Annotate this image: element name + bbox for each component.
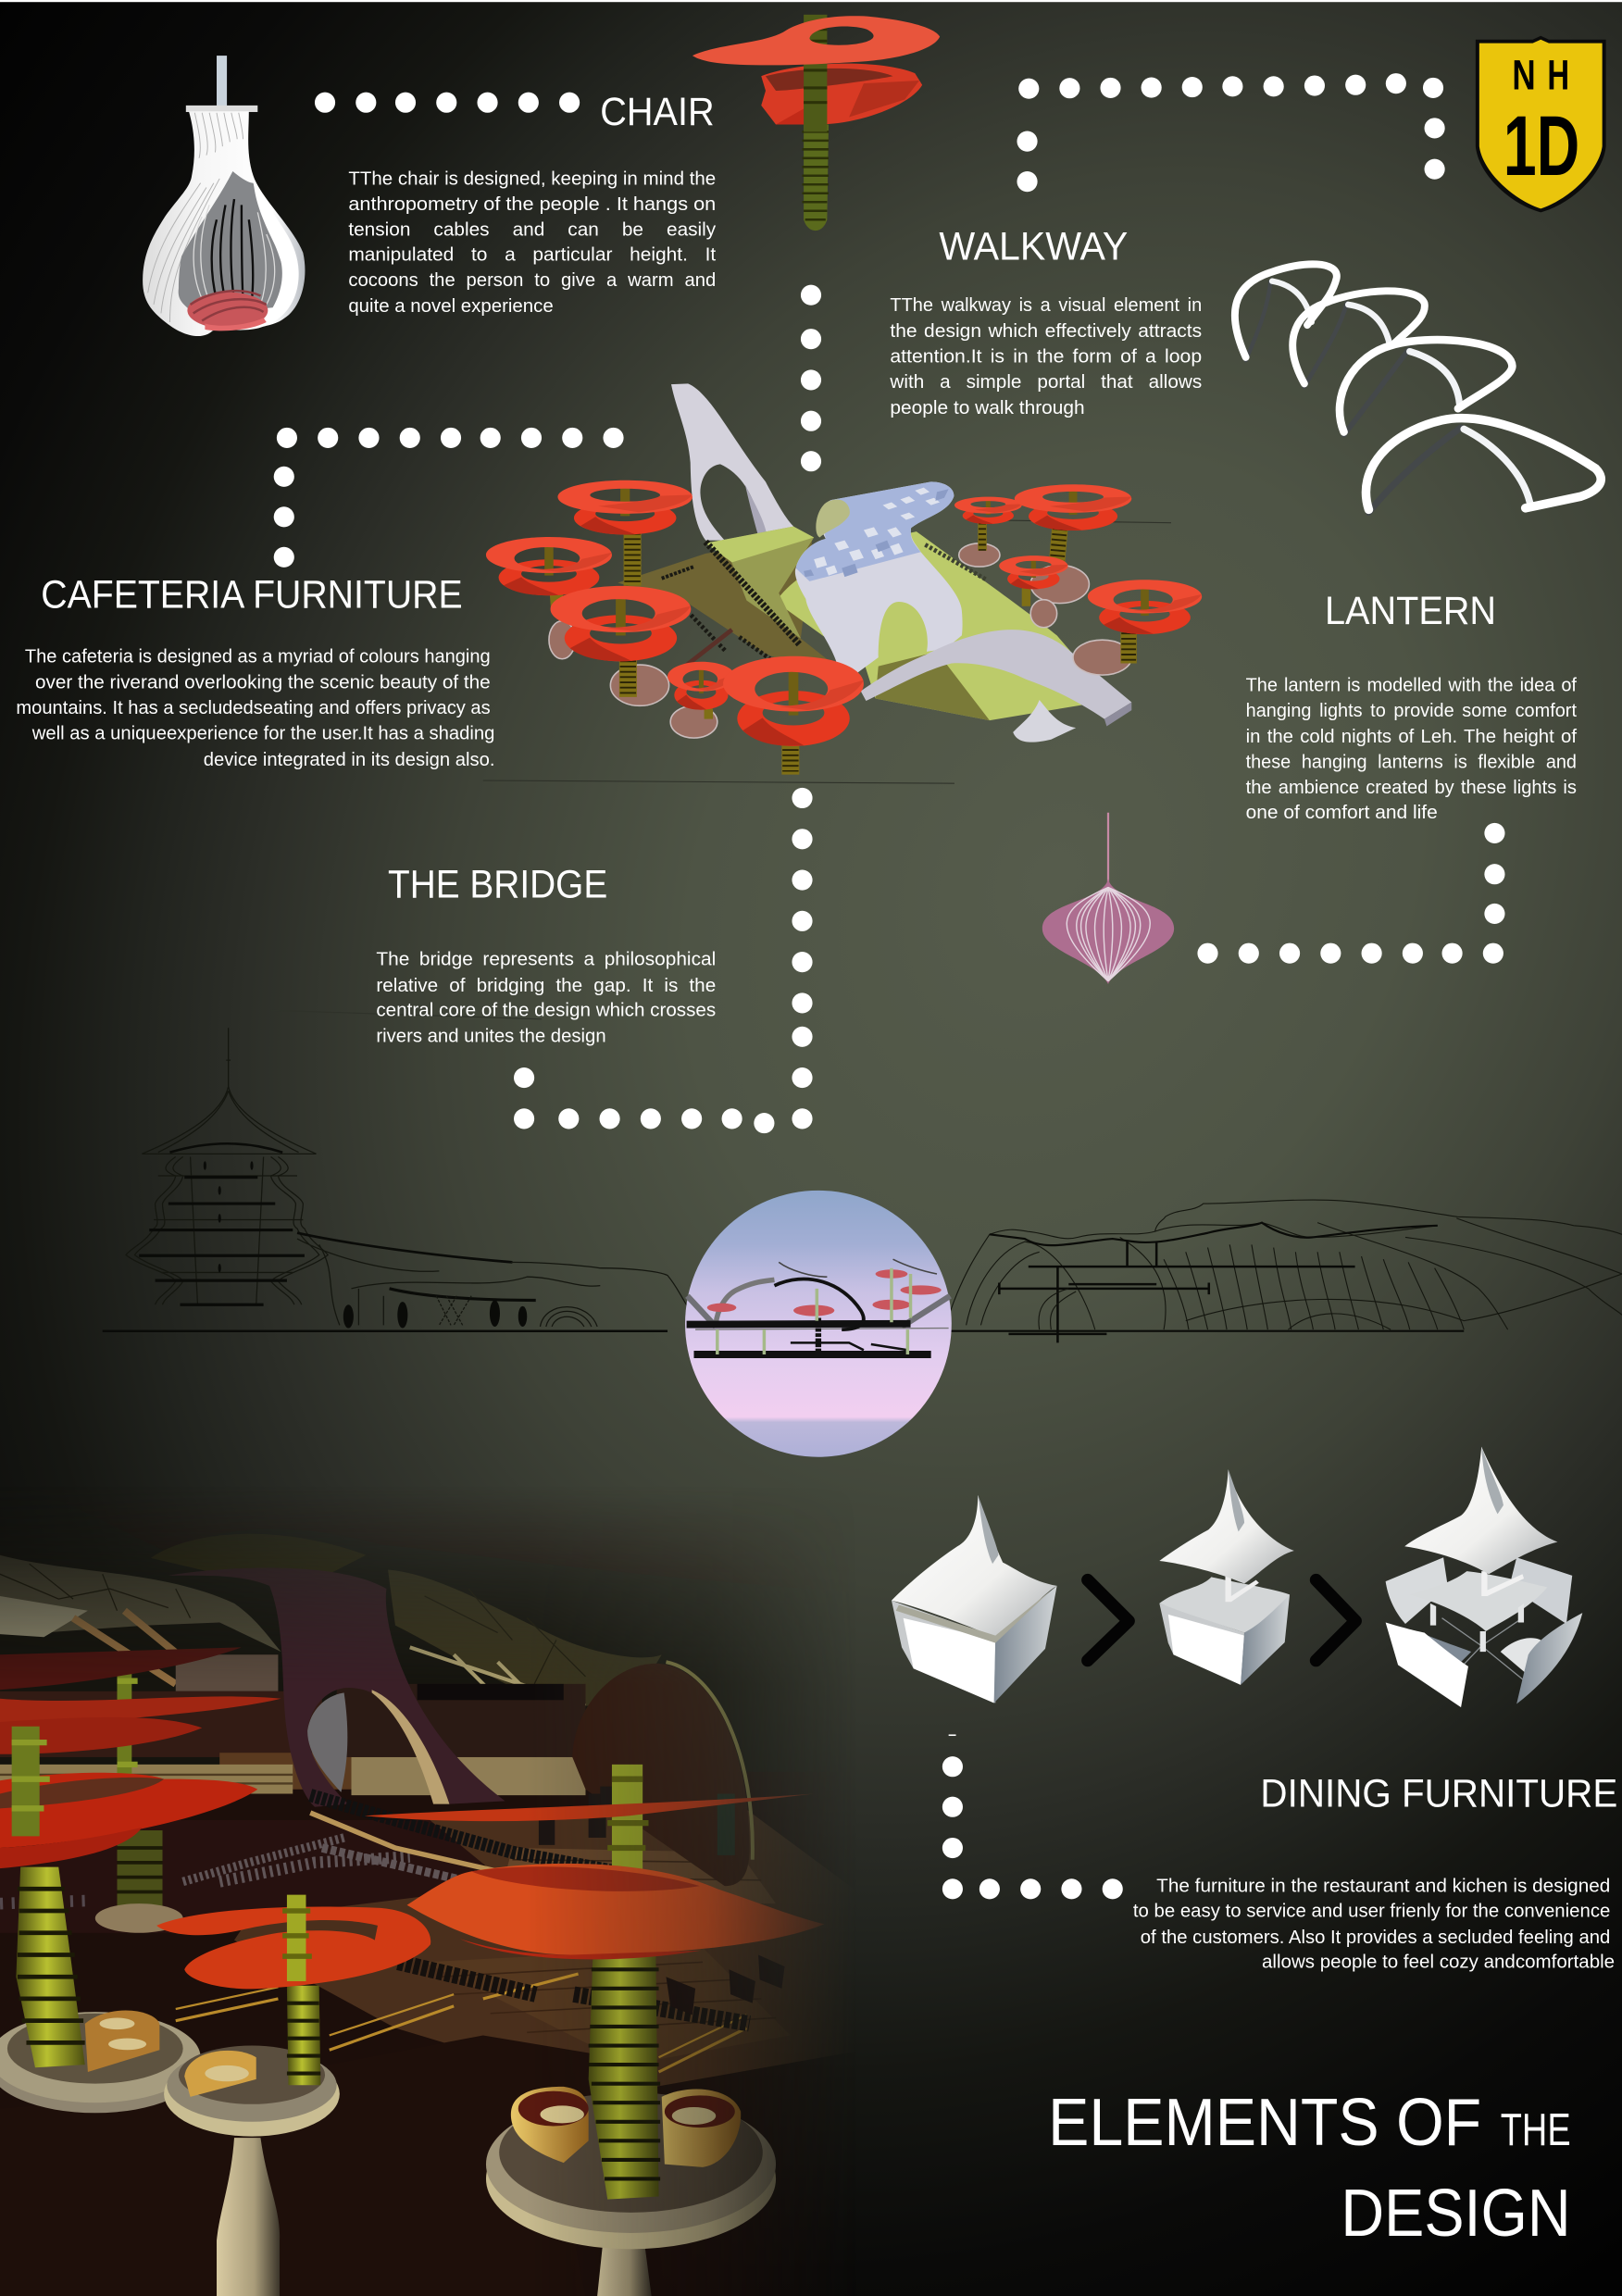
- arch 3: [1340, 340, 1512, 435]
- dotted line: chair: [315, 93, 580, 113]
- olive lower deck: [618, 537, 864, 688]
- cracked roofs: [0, 1555, 281, 1652]
- arch: [168, 1567, 505, 1807]
- ground bands: [0, 1691, 322, 1757]
- seat right: [662, 2090, 741, 2167]
- heading: the bridge: THE BRIDGE: [388, 863, 607, 907]
- text: dining description: to be easy to service and user frienly for the convenience: [1133, 1900, 1610, 1921]
- text: lantern description: the ambience created by these lights is: [1246, 777, 1577, 798]
- text: chair description: quite a novel experience: [348, 295, 554, 317]
- red rings back: [0, 1647, 242, 1690]
- thin ring: [365, 1794, 814, 1821]
- icon: red spiral canopy top: [692, 15, 940, 231]
- dotted line: walkway: [1017, 73, 1445, 192]
- circle: watercolour section vignette: [685, 1191, 952, 1457]
- arrow 2: [1316, 1580, 1355, 1661]
- icon: walkway arches: [1235, 264, 1601, 513]
- title: ELEMENTS OF: [1048, 2085, 1481, 2160]
- title: [1048, 2085, 1571, 2251]
- lime terrace upper: [705, 527, 814, 639]
- text: chair description: anthropometry of the people . It hangs on: [348, 193, 716, 215]
- text: bridge description: The bridge represents a philosophical: [376, 948, 716, 969]
- white sail with arch: [671, 383, 796, 541]
- text: lantern description: [1246, 675, 1577, 823]
- text: lantern description: these hanging lanterns is flexible and: [1246, 752, 1577, 773]
- arrow 1: [1088, 1580, 1129, 1661]
- far planter deck railings: [176, 1974, 746, 2072]
- text: chair description: [348, 168, 717, 317]
- text: chair description: manipulated to a particular height. It: [348, 244, 717, 266]
- icon: NH 1D highway shield: 1D: [1503, 99, 1579, 193]
- dark cliff with snow: [0, 1820, 483, 1933]
- text: chair description: tension cables and can be easily: [348, 219, 717, 241]
- curved white band: [795, 481, 963, 674]
- icon: NH 1D highway shield: N: [1512, 50, 1536, 98]
- heading: cafeteria furniture: CAFETERIA FURNITURE: [41, 572, 463, 617]
- arch 1: [1235, 264, 1337, 360]
- heading: chair: CHAIR: [600, 90, 715, 134]
- lime terrace right: [776, 531, 1113, 720]
- text: bridge description: rivers and unites the design: [376, 1025, 606, 1046]
- back building ribs: [71, 1608, 178, 1687]
- text: walkway description: attention.It is in the form of a loop: [890, 345, 1202, 367]
- title: DESIGN: [1341, 2176, 1571, 2251]
- drawing: left pagoda elevation line art: [103, 1028, 1464, 1331]
- people: [539, 1787, 735, 1855]
- red spiral canopies: [486, 480, 1202, 746]
- text: lantern description: hanging lights to provide some comfort: [1246, 700, 1577, 721]
- text: walkway description: the design which effectively attracts: [890, 320, 1202, 342]
- wood deck: [234, 1811, 812, 2087]
- text: cafeteria description: well as a uniqueexperience for the user.It has a shading: [31, 723, 494, 744]
- text: lantern description: one of comfort and life: [1246, 802, 1438, 823]
- illustration: dining furniture stages: [892, 1447, 1582, 1707]
- icon: NH 1D highway shield: H: [1547, 50, 1569, 98]
- seat left: [511, 2087, 589, 2163]
- icon: hanging lantern: [1042, 813, 1174, 984]
- heading: lantern: LANTERN: [1325, 589, 1496, 633]
- unit 2: canopy raised: [1159, 1469, 1294, 1685]
- text: dining description: [1133, 1875, 1615, 1973]
- text: chair description: cocoons the person to give a warm and: [348, 269, 716, 291]
- ring 2: [156, 1906, 430, 1989]
- text: cafeteria description: device integrated in its design also.: [204, 749, 494, 770]
- icon: hanging cocoon chair: [143, 56, 305, 336]
- icon: NH 1D highway shield: [1476, 36, 1606, 212]
- text: walkway description: [889, 294, 1202, 418]
- illustration: evening render of the cafeteria: [0, 1518, 824, 2296]
- text: cafeteria description: [16, 646, 494, 770]
- text: dining description: allows people to feel cozy andcomfortable: [1262, 1952, 1615, 1973]
- text: bridge description: relative of bridging the gap. It is the: [376, 975, 716, 996]
- dotted line: cafeteria: [274, 428, 624, 568]
- planter 3: [486, 1765, 776, 2296]
- text: bridge description: central core of the design which crosses: [376, 1000, 716, 1021]
- railing on bridge: [310, 1795, 615, 1871]
- dotted line: dining: [942, 1734, 1123, 1899]
- text: cafeteria description: over the riverand overlooking the scenic beauty of the: [35, 671, 491, 693]
- railings: [662, 542, 987, 667]
- arch 2: [1292, 291, 1425, 387]
- tile pattern: [796, 481, 954, 581]
- text: walkway description: with a simple portal that allows: [889, 371, 1202, 393]
- white lower arm: [861, 630, 1131, 719]
- text: walkway description: people to walk through: [890, 397, 1085, 418]
- planter 2: [164, 1986, 340, 2296]
- planters: [549, 543, 1131, 738]
- dotted line: bridge: [514, 788, 813, 1133]
- heading: walkway: WALKWAY: [939, 225, 1128, 269]
- text: cafeteria description: The cafeteria is designed as a myriad of colours hanging: [25, 646, 491, 668]
- text: bridge description: [376, 948, 716, 1046]
- big ring: [407, 1864, 824, 1959]
- text: lantern description: The lantern is modelled with the idea of: [1246, 675, 1577, 696]
- tube: [572, 1664, 750, 1886]
- text: walkway description: TThe walkway is a visual element in: [890, 294, 1202, 316]
- title: THE: [1501, 2105, 1571, 2155]
- unit 1: closed: [892, 1495, 1057, 1703]
- text: dining description: of the customers. Also It provides a secluded feeling and: [1141, 1927, 1610, 1948]
- unit 3: exploded: [1386, 1447, 1582, 1707]
- mountains: [0, 1479, 907, 1772]
- illustration: central cafeteria building model: [486, 383, 1202, 775]
- dotted line: lantern: [1197, 823, 1505, 964]
- trunks: [556, 523, 1129, 775]
- back column: [117, 1830, 163, 1913]
- dotted line: centre top: [801, 285, 821, 471]
- drawing: right structure elevation line art: [950, 1200, 1622, 1342]
- text: cafeteria description: mountains. It has a secludedseating and offers privacy as: [16, 697, 491, 718]
- text: dining description: The furniture in the restaurant and kichen is designed: [1156, 1875, 1610, 1896]
- text: chair description: TThe chair is designed, keeping in mind the: [348, 168, 716, 189]
- planter 3 shadow water: [444, 2035, 590, 2087]
- text: lantern description: in the cold nights of Leh. The height of: [1246, 726, 1577, 747]
- planter 1: [0, 1867, 201, 2113]
- arch 4: [1366, 418, 1601, 513]
